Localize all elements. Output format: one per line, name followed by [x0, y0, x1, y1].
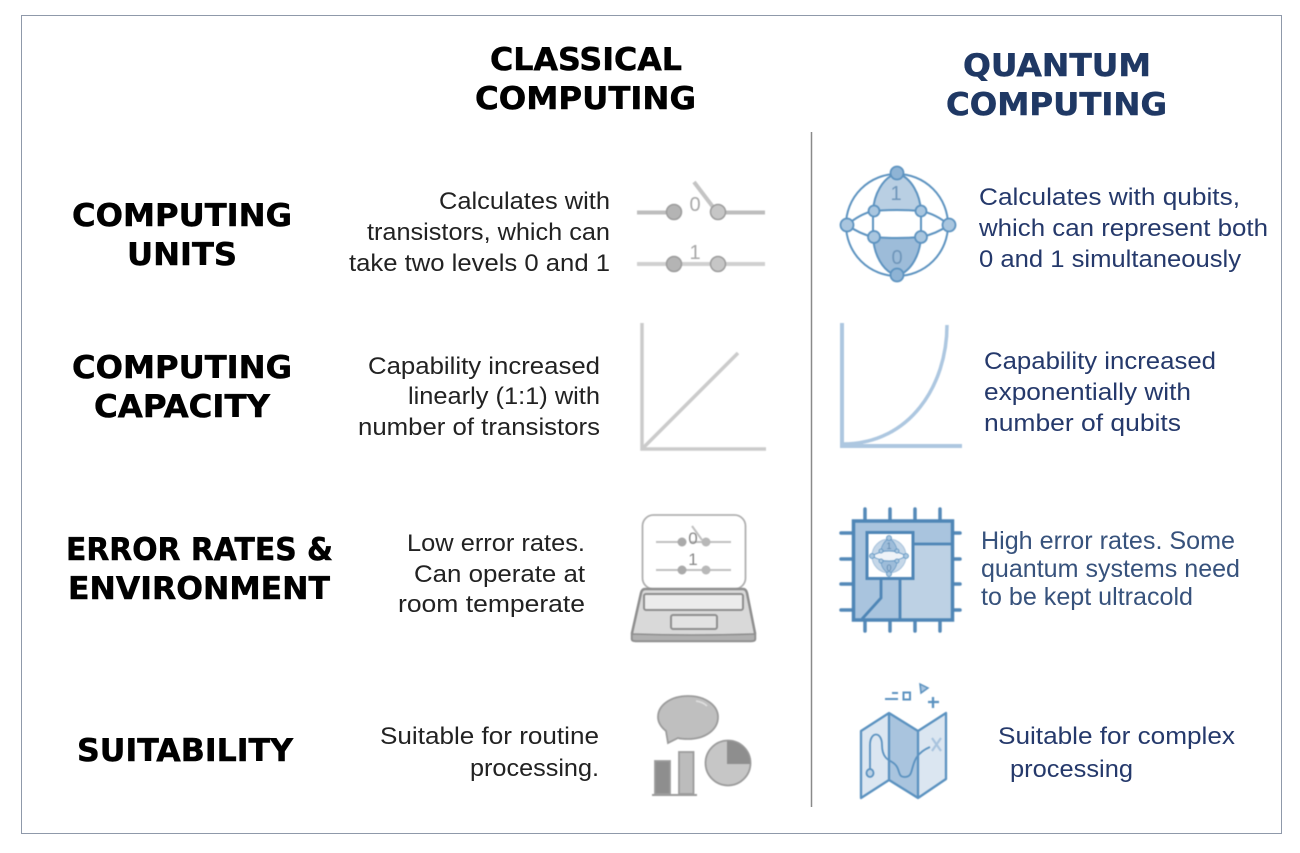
text: quantum error rates: High error rates. Some [981, 527, 1235, 555]
row label: error rates and environment: ENVIRONMENT [68, 571, 330, 607]
row label: suitability: SUITABILITY [77, 733, 294, 769]
text: classical computing capacity: linearly (1:1) with [408, 383, 600, 410]
row label: computing capacity: CAPACITY [94, 389, 271, 425]
row label: computing units: COMPUTING [72, 198, 292, 234]
icon: quantum route map [861, 684, 946, 798]
heading: quantum computing: COMPUTING [946, 87, 1167, 123]
text: quantum error rates: to be kept ultracold [981, 583, 1193, 611]
text: classical error rates [398, 530, 585, 618]
icon: quantum chip: 0 [886, 563, 892, 573]
icon: laptop: 0 [688, 529, 698, 548]
text: classical computing units: Calculates with [439, 188, 610, 215]
text: classical error rates: room temperate [398, 591, 585, 618]
text: classical computing capacity: Capability increased [368, 353, 600, 380]
row label: computing units: UNITS [127, 237, 237, 273]
text: quantum computing capacity: Capability increased [984, 348, 1216, 375]
icon: speech bubble and charts [652, 696, 750, 795]
icon: transistor switches: 1 [689, 242, 701, 264]
text: classical suitability [380, 723, 599, 782]
row label: error rates and environment: ERROR RATES & [66, 532, 333, 568]
text: quantum suitability: processing [1010, 756, 1133, 783]
text: quantum error rates: quantum systems need [981, 555, 1240, 583]
text: quantum computing capacity: exponentially with [984, 379, 1191, 406]
row label: error rates and environment [66, 532, 333, 607]
text: quantum computing units: Calculates with qubits, [979, 184, 1240, 211]
icon: laptop: 1 [688, 550, 698, 569]
icon: quantum chip: 1 [886, 541, 892, 551]
text: quantum computing units: 0 and 1 simultaneously [979, 246, 1241, 273]
text: classical suitability: Suitable for routine [380, 723, 599, 750]
text: classical computing units [349, 188, 610, 277]
text: classical computing units: transistors, which can [367, 219, 610, 246]
text: quantum computing capacity [984, 348, 1216, 437]
heading: quantum computing [946, 48, 1167, 123]
text: quantum computing units [978, 184, 1268, 273]
heading: classical computing: CLASSICAL [490, 42, 682, 78]
text: classical computing units: take two levels 0 and 1 [349, 250, 610, 277]
icon: qubit sphere [840, 166, 956, 282]
text: quantum error rates [981, 527, 1240, 611]
text: classical computing capacity [358, 353, 600, 441]
row label: computing capacity [72, 350, 292, 425]
icon: transistor switches [637, 182, 765, 272]
heading: classical computing: COMPUTING [475, 81, 696, 117]
row label: computing capacity: COMPUTING [72, 350, 292, 386]
chart: exponential growth [842, 323, 962, 446]
text: quantum computing units: which can represent both [978, 215, 1268, 242]
text: classical error rates: Can operate at [414, 561, 585, 588]
heading: classical computing [475, 42, 696, 117]
text: quantum suitability [998, 723, 1235, 783]
chart: linear growth [642, 323, 766, 449]
text: classical computing capacity: number of transistors [358, 414, 600, 441]
icon: quantum chip [841, 509, 960, 631]
text: classical suitability: processing. [470, 755, 599, 782]
text: quantum suitability: Suitable for complex [998, 723, 1235, 750]
icon: qubit sphere: 0 [891, 247, 903, 269]
icon: laptop [632, 515, 755, 641]
text: classical error rates: Low error rates. [407, 530, 585, 557]
row label: computing units [72, 198, 292, 273]
icon: qubit sphere: 1 [890, 183, 902, 205]
heading: quantum computing: QUANTUM [963, 48, 1151, 84]
icon: transistor switches: 0 [689, 194, 701, 216]
text: quantum computing capacity: number of qubits [984, 410, 1181, 437]
